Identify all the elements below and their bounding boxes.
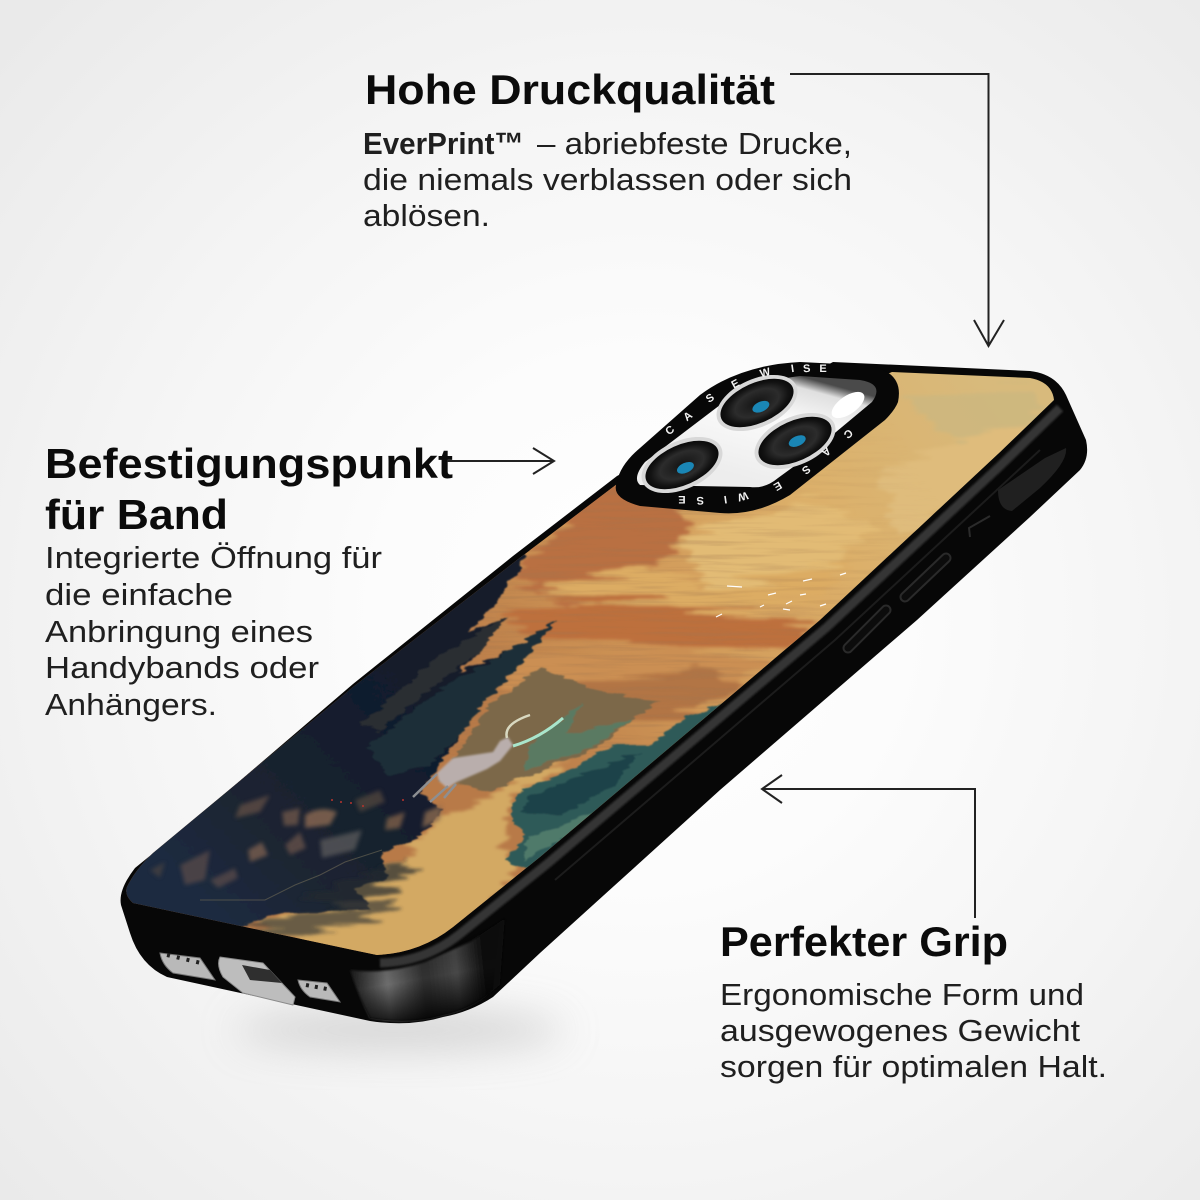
case body xyxy=(121,362,1087,1023)
heading: grip: Perfekter Grip xyxy=(720,918,1008,965)
case corner shading xyxy=(350,920,500,1021)
side button large xyxy=(998,448,1066,511)
dark trees xyxy=(126,550,558,927)
heading: print quality: Hohe Druckqualität xyxy=(365,66,775,113)
rocks xyxy=(150,790,442,888)
arrow: strap attachment xyxy=(447,448,554,474)
bump brand text: S xyxy=(799,462,812,476)
case bevel xyxy=(380,408,1060,963)
camera window xyxy=(637,376,876,487)
bump brand text: I xyxy=(790,363,795,375)
bump brand text: E xyxy=(730,377,742,391)
case groove xyxy=(555,450,1040,880)
body: print quality: die niemals verblassen oder sich xyxy=(363,162,852,197)
body: strap attachment xyxy=(45,540,382,722)
body: print quality: ablösen. xyxy=(363,198,490,233)
volume button upper inner xyxy=(905,558,946,597)
mid valley xyxy=(440,668,660,790)
lower dark streaks xyxy=(240,860,420,935)
speaker holes left xyxy=(167,955,201,963)
heading: strap attachment: Befestigungspunkt xyxy=(45,440,453,487)
lake gold xyxy=(253,760,572,965)
bump brand text: A xyxy=(681,409,695,424)
speaker left xyxy=(160,953,215,980)
birds xyxy=(716,573,846,617)
shoreline xyxy=(200,850,382,900)
heading: strap attachment: für Band xyxy=(45,491,228,538)
bump brand text: A xyxy=(819,444,833,458)
brush texture xyxy=(492,506,842,747)
case corner highlight xyxy=(350,918,505,1021)
bump brand text: E xyxy=(771,479,784,493)
bump brand text: C xyxy=(841,426,855,440)
flash xyxy=(827,387,869,423)
volume button lower inner xyxy=(848,610,886,648)
bump brand text: W xyxy=(759,366,772,380)
heading: strap attachment xyxy=(45,440,453,538)
artwork xyxy=(126,372,1054,955)
body: print quality xyxy=(363,126,852,233)
bump brand text: C xyxy=(663,423,677,438)
bump brand text: S xyxy=(803,363,811,375)
body: grip: Ergonomische Form und xyxy=(720,977,1084,1012)
body: strap attachment: Integrierte Öffnung für xyxy=(45,540,382,575)
lens right xyxy=(746,402,844,480)
body: strap attachment: Anbringung eines xyxy=(45,614,313,649)
body: strap attachment: die einfache xyxy=(45,577,233,612)
speaker right xyxy=(298,980,340,1002)
deer xyxy=(413,715,563,802)
bump brand text: S xyxy=(704,392,717,406)
text: grip xyxy=(720,918,1107,1084)
charging port xyxy=(219,957,295,1005)
body: print quality: – abriebfeste Drucke, xyxy=(537,126,852,161)
bump brand text: E xyxy=(678,493,686,505)
lens left xyxy=(633,426,731,504)
volume button upper xyxy=(905,558,946,597)
body: strap attachment: Anhängers. xyxy=(45,687,217,722)
bump brand text: W xyxy=(736,489,749,503)
body: grip xyxy=(720,977,1107,1084)
phone case xyxy=(90,350,1100,1023)
bump brand text xyxy=(663,363,855,506)
port opening xyxy=(242,965,282,983)
phone shadow xyxy=(235,1010,565,1050)
sky colour bands xyxy=(500,390,1040,725)
arrow: grip xyxy=(762,775,975,918)
red dots xyxy=(331,800,404,806)
side button small xyxy=(969,516,990,537)
body: strap attachment: Handybands oder xyxy=(45,650,319,685)
teal trees xyxy=(505,703,735,870)
bump brand text: I xyxy=(723,493,728,505)
lens top xyxy=(708,364,806,442)
speaker holes right xyxy=(306,985,332,990)
body: grip: ausgewogenes Gewicht xyxy=(720,1013,1080,1048)
body: grip: sorgen für optimalen Halt. xyxy=(720,1049,1107,1084)
bump brand text: S xyxy=(696,494,704,506)
arrow: print quality xyxy=(790,74,1004,346)
text: print quality xyxy=(363,66,852,233)
volume button lower xyxy=(848,610,886,648)
text: strap attachment xyxy=(45,440,453,722)
camera bump xyxy=(616,362,899,513)
body: print quality: EverPrint™ xyxy=(363,126,524,161)
bump brand text: E xyxy=(819,363,827,375)
